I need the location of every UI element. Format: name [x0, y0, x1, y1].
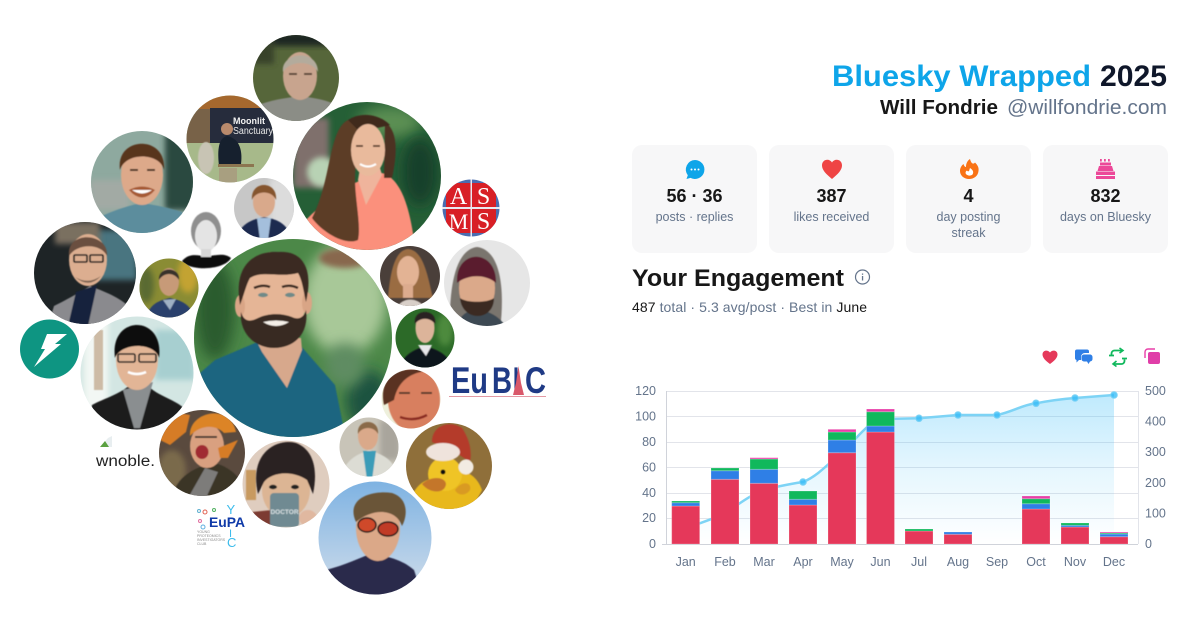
header: name and handle: @willfondrie.com: [1007, 97, 1167, 119]
heading: Your Engagement: Your Engagement: [632, 265, 844, 292]
logo: EuBIC: B: [492, 360, 512, 401]
panel: days on Bluesky: [1043, 145, 1168, 253]
month labels: May: [830, 555, 855, 569]
avatar: man in grey by pond: [253, 35, 339, 121]
right axis labels: 100: [1145, 506, 1166, 520]
logo: teal lightning bolt: [20, 320, 79, 378]
left axis labels: [635, 384, 656, 551]
panel: days on Bluesky: 832: [1090, 186, 1121, 206]
icon: quotes legend: [1145, 349, 1160, 364]
chart legend: [1042, 348, 1160, 366]
bar: May: [828, 429, 856, 544]
logo: EuBIC: [449, 360, 546, 401]
avatar: young man in dark sweater: [396, 308, 454, 368]
left axis labels: 100: [635, 410, 656, 424]
right axis labels: 200: [1145, 476, 1166, 490]
right axis labels: 300: [1145, 445, 1166, 459]
month labels: Jun: [870, 555, 891, 569]
bar: Feb: [711, 468, 739, 544]
avatar: woman with long hair: [380, 246, 440, 306]
avatar: main profile photo: [190, 237, 394, 440]
panel: posts and replies: [632, 145, 757, 253]
left axis labels: 0: [649, 537, 656, 551]
cumulative line: [686, 395, 1114, 529]
left axis labels: 80: [642, 435, 656, 449]
panel: posts and replies: 56 · 36: [666, 186, 723, 206]
icon: info: [856, 270, 870, 284]
logo: EuPA YPIC: EuPA: [209, 514, 245, 530]
month labels: Mar: [753, 555, 775, 569]
avatar: close-up of smiling man: [382, 370, 440, 428]
left axis labels: 120: [635, 384, 656, 398]
panel: days on Bluesky: days on Bluesky: [1060, 210, 1152, 224]
icon: flame: [960, 159, 979, 179]
month labels: Sep: [986, 555, 1008, 569]
mug text: DOCTOR: [270, 509, 299, 516]
panel: day posting streak: 4: [963, 186, 974, 206]
logo: ASMS: S: [477, 209, 490, 235]
text: engagement summary: 487 total · 5.3 avg/post · Best in June: [632, 299, 867, 315]
panel: likes received: likes received: [794, 210, 869, 224]
cumulative area: [686, 395, 1114, 544]
bar: Mar: [750, 458, 778, 544]
left axis labels: 20: [642, 511, 656, 525]
logo: EuBIC: I: [513, 360, 519, 401]
header: name and handle: [880, 97, 1167, 119]
month labels: Dec: [1103, 555, 1125, 569]
right axis labels: 0: [1145, 537, 1152, 551]
avatar: man with glasses in dark suit: [78, 314, 196, 432]
logo: EuBIC: C: [525, 360, 546, 401]
bar: Apr: [789, 491, 817, 544]
logo: ASMS: S: [477, 184, 490, 210]
month labels: Jan: [676, 555, 696, 569]
broken image with alt text: wnoble.: [95, 436, 155, 470]
avatar: man in hood and beanie: [444, 240, 530, 326]
bar: Oct: [1022, 496, 1050, 544]
logo: EuPA YPIC: PROTEOMICS: [197, 534, 221, 538]
panel: day posting streak: [906, 145, 1031, 253]
logo: ASMS: A: [450, 184, 468, 210]
cumulative dots: [800, 392, 1117, 485]
stacked bars: [672, 409, 1128, 544]
panel: posts and replies: posts · replies: [656, 210, 733, 224]
month labels: [676, 555, 1125, 569]
right axis labels: 500: [1145, 384, 1166, 398]
month labels: Aug: [947, 555, 969, 569]
logo: EuPA YPIC: I: [229, 528, 232, 540]
broken image with alt text: wnoble.: wnoble.: [95, 453, 155, 470]
icon: heart: [822, 160, 842, 179]
avatar: person at Moonlit Sanctuary: Sanctuary: [233, 126, 273, 137]
left axis labels: 60: [642, 460, 656, 474]
avatar: man with red sunglasses on the beach: [316, 480, 434, 600]
chart: monthly engagement: [635, 384, 1166, 569]
sign text: Moonlit: [233, 116, 266, 127]
avatar: man in navy suit: [234, 178, 294, 238]
icon: reposts legend: [1109, 348, 1127, 366]
panel: likes received: 387: [816, 186, 847, 206]
bar: Jul: [905, 529, 933, 544]
logo: EuBIC: Eu: [451, 360, 488, 401]
month labels: Oct: [1026, 555, 1046, 569]
logo: EuPA YPIC: [197, 502, 245, 550]
month labels: Nov: [1064, 555, 1087, 569]
logo: EuPA YPIC: INVESTIGATORS: [197, 538, 226, 542]
logo: EuPA YPIC: YOUNG: [197, 530, 210, 534]
panel: day posting streak: streak: [951, 226, 986, 240]
month labels: Jul: [911, 555, 927, 569]
panel: day posting streak: day posting: [937, 210, 1001, 224]
logo: ASMS: M: [449, 209, 468, 234]
avatar: man drinking from a mug: [242, 440, 330, 530]
header: title: 2025: [1100, 60, 1167, 93]
panel: likes received: [769, 145, 894, 253]
avatar cluster: [20, 32, 546, 600]
logo: EuPA YPIC: C: [227, 535, 236, 550]
bar: Jun: [866, 409, 894, 544]
avatar: woman in coral shirt: [293, 102, 441, 250]
avatar: man with glasses and grey blazer: [32, 220, 138, 326]
right axis labels: 400: [1145, 414, 1166, 428]
avatar: person at Moonlit Sanctuary: [186, 95, 275, 186]
avatar: smiling man in teal shirt: [91, 131, 193, 233]
logo: EuPA YPIC: CLUB: [197, 542, 207, 546]
left axis labels: 40: [642, 486, 656, 500]
icon: replies legend: [1075, 350, 1092, 364]
logo: EuPA YPIC: Y: [226, 502, 236, 517]
bar: Jan: [672, 501, 700, 544]
avatar: black and white portrait of woman: [182, 212, 231, 268]
avatar: man in pale suit with striped tie: [340, 418, 398, 476]
icon: speech bubble: [686, 160, 704, 179]
bar: Nov: [1061, 523, 1089, 544]
logo: ASMS: [442, 179, 500, 237]
month labels: Apr: [793, 555, 813, 569]
avatar: rubber duck in Santa hat: [405, 422, 493, 512]
avatar: man in navy jacket with foliage: [140, 258, 198, 318]
header: title: Bluesky Wrapped: [832, 60, 1091, 93]
header: name and handle: Will Fondrie: [880, 97, 998, 119]
month labels: Feb: [714, 555, 736, 569]
icon: heart legend: [1042, 351, 1058, 364]
chart grid: [662, 391, 1138, 544]
bar: Aug: [944, 532, 972, 544]
bar: Dec: [1100, 532, 1128, 544]
right axis labels: [1145, 384, 1166, 551]
icon: cake: [1096, 159, 1115, 179]
avatar: man in orange elf hat: [158, 409, 247, 500]
